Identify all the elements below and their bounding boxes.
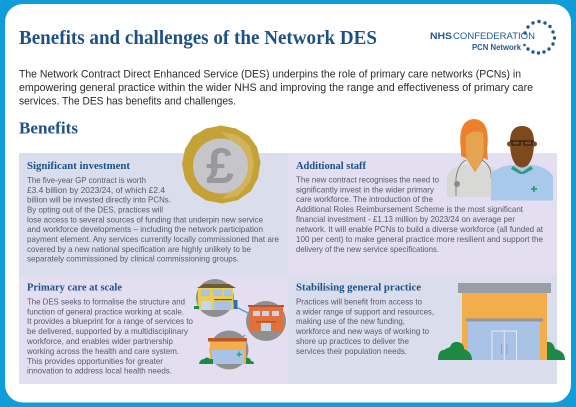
- panel: additional staff: Additional staff: [296, 161, 366, 172]
- panel: stabilising general practice: workforce and new ways of working to: [295, 327, 429, 336]
- panel: additional staff: [288, 153, 557, 275]
- panel: stabilising general practice: Practices will benefit from access to: [296, 297, 422, 306]
- logo: NHS Confederation PCN Network: [430, 20, 556, 55]
- panel: significant investment: and workforce developments – including the network participation: [27, 225, 263, 234]
- panel: primary care at scale: It provides a blueprint for a range of services to: [27, 317, 193, 326]
- panel: additional staff: network. It will enable PCNs to build a diverse workforce (all funded at: [296, 225, 544, 234]
- panel: primary care at scale: workforce, and enables wider partnership: [26, 337, 173, 346]
- panel: significant investment: £3.4 billion by 2023/24, of which £2.4: [27, 186, 165, 195]
- panel: significant investment: The five-year GP contract is worth: [27, 176, 146, 185]
- icon: pound coin: [182, 126, 260, 204]
- logo: NHS Confederation PCN Network: NHS: [430, 31, 452, 42]
- logo: NHS Confederation PCN Network: PCN Network: [472, 43, 522, 52]
- panel: stabilising general practice: a wider range of support and resources,: [296, 307, 434, 316]
- panel: primary care at scale: working across the health and care system.: [26, 347, 179, 356]
- icon: GP practice building: [438, 283, 565, 360]
- panel: primary care at scale: The DES seeks to formalise the structure and: [27, 297, 185, 306]
- panel: primary care at scale: Primary care at scale: [27, 283, 122, 294]
- panel: significant investment: By opting out of the DES, practices will: [27, 206, 163, 214]
- intro text: empowering general practice within the wider NHS and improving the range and effectiveness of primary care: [19, 82, 533, 94]
- panel: stabilising general practice: services their population needs.: [296, 347, 407, 356]
- panel: primary care at scale: function of general practice working at scale.: [27, 307, 184, 316]
- heading: Benefits: Benefits: [19, 118, 78, 138]
- panel: significant investment: separately commissioned by clinical commissioning groups.: [27, 255, 239, 264]
- panel: primary care at scale: [19, 275, 288, 384]
- panel: significant investment: Significant investment: [27, 161, 131, 172]
- panel: significant investment: lose access to several sources of funding that underpin new service: [27, 215, 263, 224]
- panel: additional staff: delivery of the new service specifications.: [296, 245, 439, 254]
- panel: stabilising general practice: Stabilising general practice: [296, 283, 421, 294]
- panel: significant investment: billion will be invested directly into PCNs.: [27, 196, 171, 205]
- panel: significant investment: payment element. Any services currently locally commissioned that are: [27, 235, 279, 244]
- panel: stabilising general practice: shore up practices to deliver the: [296, 337, 409, 346]
- intro text: The Network Contract Direct Enhanced Service (DES) underpins the role of primary care networks (PCNs) in: [19, 68, 521, 80]
- panel: significant investment: covered by a new national specification are highly unlikely to be: [27, 245, 251, 254]
- panel: additional staff: care workforce. The introduction of the: [296, 195, 433, 204]
- panel: primary care at scale: innovation to address local health needs.: [27, 367, 172, 376]
- panel: primary care at scale: This provides opportunities for greater: [27, 357, 163, 366]
- panel: stabilising general practice: [288, 275, 557, 384]
- icon: connected practice buildings: [194, 279, 286, 370]
- panel: additional staff: 100 per cent) to make general practice more resilient and support the: [296, 235, 543, 244]
- title: Benefits and challenges of the Network DES: [19, 27, 377, 49]
- panel: significant investment: [19, 153, 288, 275]
- icon: pound coin: £: [206, 138, 234, 194]
- panel: additional staff: The new contract recognises the need to: [296, 176, 439, 185]
- logo: NHS Confederation PCN Network: CONFEDERATION: [453, 31, 535, 42]
- panel: additional staff: Additional Roles Reimbursement Scheme is the most significant: [296, 205, 524, 214]
- icon: two staff members: [447, 119, 553, 200]
- intro text: services. The DES has benefits and challenges.: [19, 96, 236, 108]
- panel: stabilising general practice: making use of the new funding,: [296, 317, 405, 326]
- intro text: [19, 68, 533, 108]
- panel: additional staff: significantly invest in the wider primary: [296, 186, 435, 194]
- panel: additional staff: financial investment - £1.13 million by 2023/24 on average per: [296, 215, 515, 224]
- panel: primary care at scale: be delivered, supported by a multidisciplinary: [27, 327, 189, 336]
